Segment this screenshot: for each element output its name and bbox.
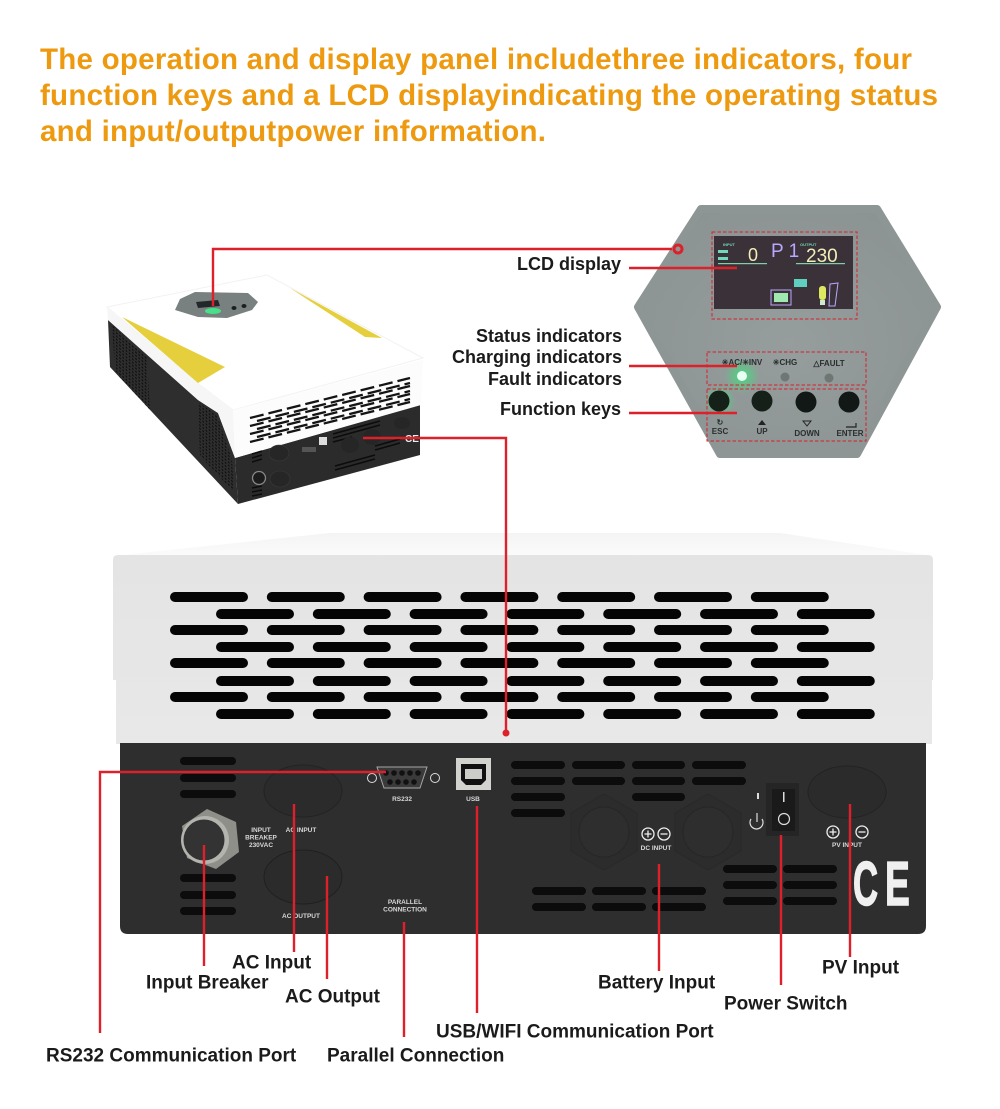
LCD screen	[714, 236, 853, 309]
AC input port: AC INPUT	[286, 827, 316, 834]
function keys: UP	[756, 427, 768, 436]
LCD dashed box	[712, 232, 857, 319]
RS232 connector	[368, 767, 440, 803]
parallel connection label: PARALLEL	[388, 899, 422, 906]
battery DC input	[571, 794, 741, 870]
title: The operation and display panel includethree indicators, four	[40, 43, 913, 76]
callout: function keys: Function keys	[500, 399, 621, 419]
PV input	[808, 766, 886, 849]
status dashed box	[707, 352, 866, 385]
title: and input/outputpower information.	[40, 115, 546, 148]
black panel vents	[184, 761, 833, 911]
black rear panel	[120, 743, 926, 934]
callout: AC output: AC Output	[285, 986, 381, 1008]
input breaker: BREAKEP	[245, 834, 278, 842]
mini ports	[252, 421, 400, 496]
white front face	[233, 360, 423, 458]
callout: parallel connection: Parallel Connection	[327, 1046, 504, 1066]
LCD screen: 0	[748, 245, 758, 265]
function keys: ↻	[717, 418, 724, 427]
lid top	[113, 533, 933, 556]
status indicators: ✳CHG	[773, 358, 797, 367]
callout: power switch: Power Switch	[724, 994, 848, 1014]
white left band	[107, 307, 235, 458]
battery DC input: DC INPUT	[641, 845, 671, 852]
function keys dashed box	[707, 389, 866, 441]
CE mark: E	[885, 849, 910, 918]
AC output port	[264, 850, 342, 920]
function keys: ENTER	[836, 429, 864, 438]
LCD screen: INPUT	[723, 242, 736, 247]
side black face	[108, 320, 238, 504]
USB port: USB	[466, 796, 480, 803]
RS232 connector: RS232	[392, 796, 412, 803]
callout: USB/WIFI: USB/WIFI Communication Port	[436, 1022, 714, 1042]
white vent panel	[113, 555, 933, 744]
title	[40, 43, 938, 148]
callout: RS232	[46, 772, 386, 1066]
LCD screen: 230	[806, 246, 838, 267]
rear black face	[235, 405, 420, 504]
USB port	[456, 758, 491, 803]
callout: indicators: Fault indicators	[488, 369, 622, 389]
input breaker: INPUT	[251, 827, 271, 834]
callout: battery input: Battery Input	[598, 972, 716, 994]
vent rows	[250, 378, 410, 442]
large inverter rear view	[113, 533, 933, 934]
PV input: PV INPUT	[832, 842, 862, 849]
callout: input breaker: Input Breaker	[146, 972, 269, 994]
CE mark	[853, 849, 910, 919]
callout: indicators: Charging indicators	[452, 347, 622, 367]
title: function keys and a LCD displayindicating the operating status	[40, 79, 938, 112]
AC output port: AC OUTPUT	[282, 913, 320, 920]
LCD screen: OUTPUT	[800, 242, 817, 247]
function keys	[704, 385, 864, 438]
status indicators	[722, 358, 845, 394]
CE mark: C	[853, 849, 878, 919]
callout: LCD display: LCD display	[517, 254, 621, 274]
callout: LCD display link	[213, 245, 682, 306]
display panel hexagon	[638, 209, 937, 454]
function keys: DOWN	[794, 429, 820, 438]
vent slots	[175, 597, 870, 714]
callout: battery input	[598, 864, 716, 994]
small inverter product view	[107, 275, 423, 504]
parallel connection label	[383, 899, 427, 914]
input breaker: 230VAC	[249, 842, 273, 849]
LCD screen: P1	[771, 241, 804, 262]
parallel connection label: CONNECTION	[383, 906, 427, 914]
callout: PV input: PV Input	[822, 958, 900, 978]
callout: AC input: AC Input	[232, 952, 312, 974]
connector arrow between views	[363, 438, 510, 736]
callout: indicators: Status indicators	[476, 326, 622, 346]
status indicators: △FAULT	[812, 359, 845, 368]
callout: RS232: RS232 Communication Port	[46, 1046, 297, 1066]
small inverter product view: CE	[405, 434, 419, 445]
function keys: ESC	[712, 427, 728, 436]
white lid top	[107, 275, 423, 410]
power switch	[750, 783, 799, 836]
mini panel	[175, 292, 258, 318]
AC input port	[264, 765, 342, 834]
yellow accents	[122, 317, 225, 383]
input breaker	[181, 809, 278, 869]
status indicators: ✳AC/✳INV	[722, 358, 763, 367]
callout: AC output	[285, 876, 381, 1008]
callout: indicators	[452, 326, 737, 389]
